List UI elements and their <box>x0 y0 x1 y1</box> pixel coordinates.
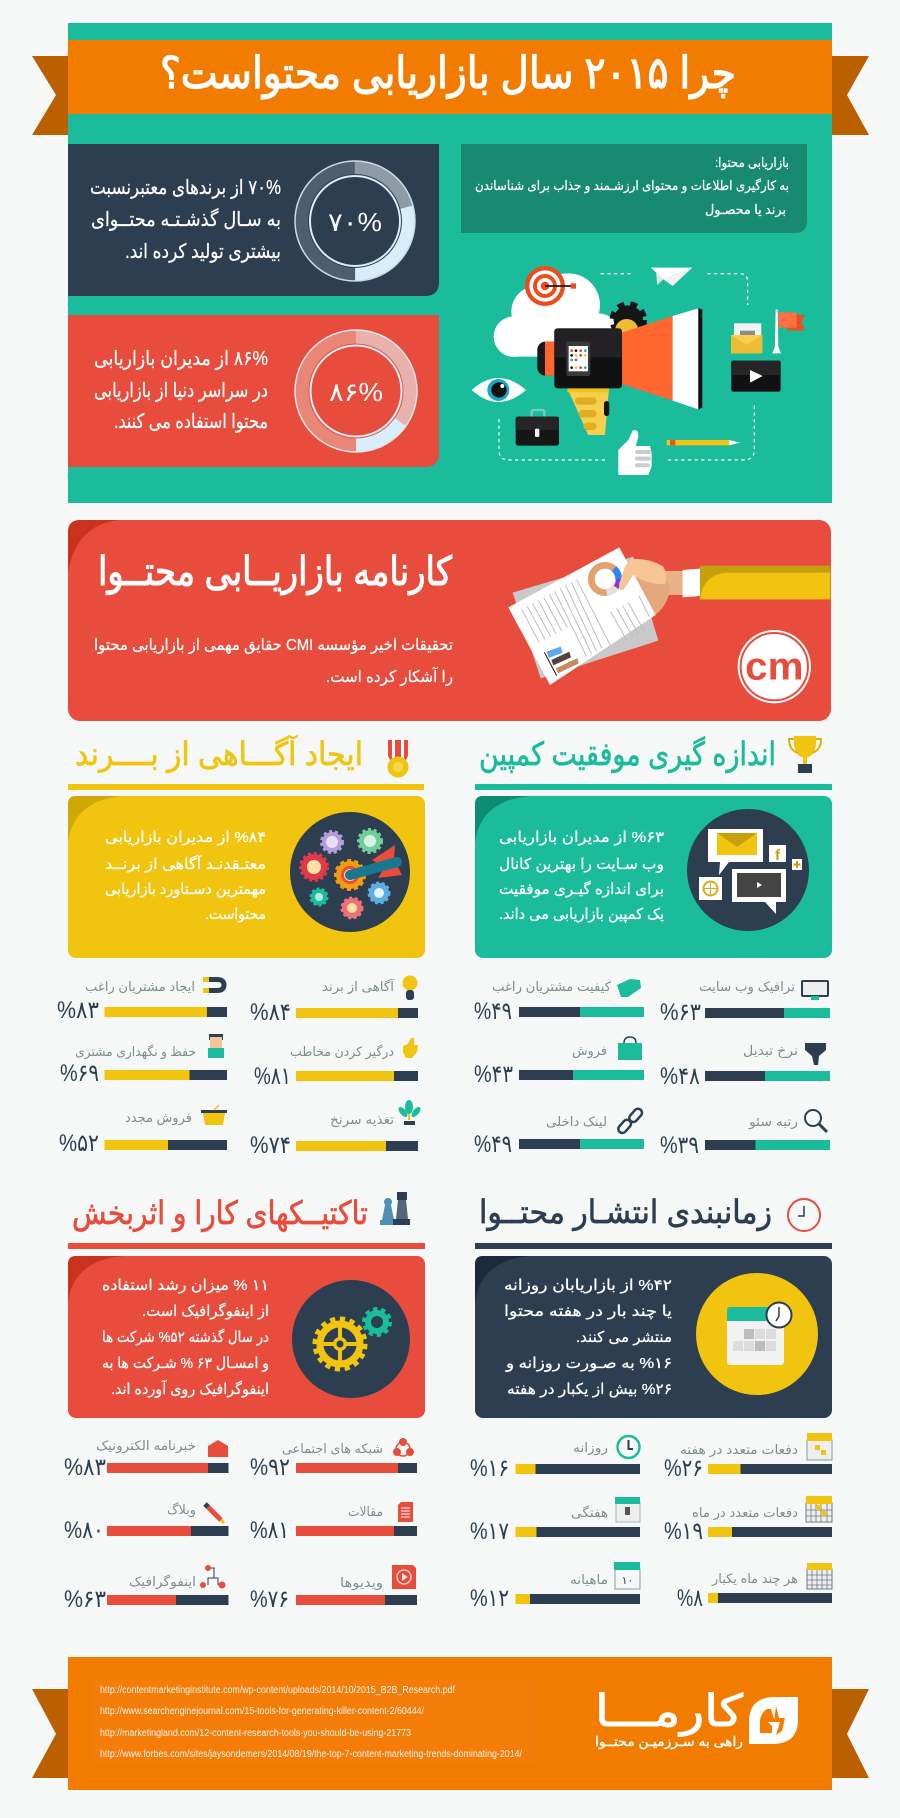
icon: weekly calendar <box>807 1433 832 1460</box>
stat: several times a month: %۱۹ <box>664 1518 703 1545</box>
icon: email <box>208 1440 228 1457</box>
icon: envelope <box>731 323 762 353</box>
stat: lead quality <box>474 979 644 1025</box>
icon: chess pieces <box>380 1192 410 1225</box>
text block <box>499 829 664 924</box>
stat: audience engagement: %۸۱ <box>254 1063 291 1090</box>
text block: یا چند بار در هفته محتوا <box>504 1303 672 1320</box>
stat: repeat sales <box>59 1105 227 1157</box>
stat: videos: %۷۶ <box>250 1586 289 1613</box>
icon: grid calendar <box>807 1563 832 1589</box>
stat: lead nurturing <box>250 1100 422 1159</box>
panel: brand callout <box>68 796 425 958</box>
stat: articles: %۸۱ <box>250 1517 289 1544</box>
stat: monthly: %۱۲ <box>470 1585 509 1612</box>
text block <box>102 1277 269 1398</box>
text block <box>504 1277 672 1398</box>
footer <box>32 1657 869 1790</box>
panel: 86 percent stat: محتوا استفاده می کنند. <box>114 411 268 433</box>
icon: monthly calendar <box>806 1496 832 1522</box>
heading: اندازه گیری موفقیت کمپین <box>479 736 776 773</box>
stat: inbound links <box>474 1107 644 1158</box>
stat: website traffic <box>660 979 830 1026</box>
stat: social media <box>250 1438 417 1481</box>
panel: content marketing scorecard banner <box>68 520 831 721</box>
heading: ایجاد آگـــاهی از بــــرند <box>75 734 363 773</box>
section: effective tactics <box>68 1192 425 1418</box>
stat: inbound links: %۴۹ <box>474 1131 512 1158</box>
source links: http://marketingland.com/12-content-research-tools-you-should-be-using-21773 <box>100 1728 411 1739</box>
icon: magnet <box>203 977 224 993</box>
source links: http://www.forbes.com/sites/jaysondemers/2014/08/19/the-top-7-content-marketing-trends-dominating-2014/ <box>100 1749 522 1760</box>
icon: chain link <box>617 1107 644 1135</box>
stat: conversion rate <box>660 1043 830 1090</box>
icon: connector nodes <box>200 1565 226 1588</box>
icon: target <box>525 266 576 306</box>
panel: definition: برند یا محصـول <box>705 202 786 218</box>
stat: daily: روزانه <box>573 1440 608 1456</box>
stat: website traffic: %۶۳ <box>660 999 701 1026</box>
stat: conversion rate: نرخ تبدیل <box>743 1043 798 1059</box>
panel: 70 percent stat: ۷۰% از برندهای معتبرنسبت <box>90 177 281 199</box>
chart: 70 percent donut <box>295 161 415 281</box>
text block: اینفوگرافیک روی آورده اند. <box>111 1380 269 1398</box>
stat: infographics <box>64 1565 228 1613</box>
text block: محتواست. <box>205 906 266 923</box>
stat: daily: %۱۶ <box>470 1455 509 1482</box>
icon: teal monthly calendar: ۱۰ <box>622 1575 633 1587</box>
section: campaign success <box>475 736 832 958</box>
panel: campaign callout <box>475 796 832 958</box>
icon: calendar circle <box>696 1273 818 1395</box>
icon: plant <box>397 1100 422 1125</box>
stat: sales: %۴۳ <box>474 1061 513 1088</box>
icon: pencil <box>667 440 740 445</box>
icon: medal <box>388 740 408 778</box>
stat: several times a month <box>664 1496 832 1545</box>
panel: 86 percent stat: در سراسر دنیا از بازاریابی <box>94 380 268 402</box>
logo: CM <box>738 630 811 703</box>
text block <box>105 829 266 923</box>
stat: social media: شبکه های اجتماعی <box>282 1441 383 1456</box>
stat: several times a week: دفعات متعدد در هفته <box>680 1442 798 1458</box>
icon: basket <box>201 1105 227 1125</box>
stat: every few months <box>677 1563 832 1612</box>
stat: repeat sales: فروش مجدد <box>125 1110 192 1126</box>
stat: conversion rate: %۴۸ <box>660 1063 700 1090</box>
stat: audience engagement: درگیر کردن مخاطب <box>290 1044 394 1060</box>
text block: یک کمپین بازاریابی می داند. <box>499 906 664 924</box>
text block: را آشکار کرده است. <box>326 667 453 687</box>
stat: email newsletter: خبرنامه الکترونیک <box>96 1438 196 1454</box>
panel: definition: بازاریابی محتوا: <box>715 155 789 171</box>
stat: SEO rank: رتبه سئو <box>748 1114 798 1130</box>
text block: %۲۶ بیش از یکبار در هفته <box>507 1381 672 1398</box>
icon: social network <box>393 1438 414 1456</box>
stat: several times a week <box>664 1433 832 1482</box>
stat: brand awareness: آگاهی از برند <box>322 978 395 995</box>
stat: social media: %۹۲ <box>250 1454 290 1481</box>
icon: briefcase <box>516 410 559 446</box>
icon: light bulb <box>402 976 418 1000</box>
stat: infographics: اینفوگرافیک <box>129 1574 196 1590</box>
stat: lead generation <box>57 977 227 1024</box>
icon: clock <box>788 1199 820 1231</box>
icon: funnel <box>805 1043 826 1065</box>
icon: paper plane <box>651 268 692 286</box>
stat: lead quality: %۴۹ <box>474 998 512 1025</box>
icon: trophy <box>789 736 821 773</box>
icon: gears circle <box>292 1280 410 1398</box>
icon: eye <box>472 378 526 402</box>
illustration: hand holding report <box>508 547 830 703</box>
stat: infographics: %۶۳ <box>64 1586 106 1613</box>
icon: gears and dart circle <box>290 812 410 932</box>
stat: monthly: ماهیانه <box>570 1572 608 1587</box>
stat: blog <box>64 1501 228 1544</box>
icon: flag <box>772 309 805 353</box>
title banner <box>68 40 832 114</box>
text block: مهمترین دسـتاورد بازاریابی <box>105 881 266 898</box>
text block <box>94 637 453 687</box>
icon: cloud <box>494 273 620 357</box>
text block: %۱۶ به صـورت روزانه و <box>505 1355 672 1372</box>
stats: brand goals <box>57 976 422 1159</box>
icon: thumbs up <box>618 430 652 475</box>
stat: blog: %۸۰ <box>64 1517 104 1544</box>
text block: %۸۴ از مدیران بازاریابی <box>105 829 266 846</box>
ribbon: title tails <box>32 56 869 135</box>
section: publishing schedule <box>475 1194 832 1418</box>
panel: 70 percent stat: به سـال گذشـتـه محتــوای <box>91 208 281 231</box>
text block: از اینفوگرافیک است. <box>142 1302 269 1320</box>
panel: 86 percent stat <box>68 315 439 467</box>
icon: monitor <box>802 981 828 1000</box>
stat: customer retention: %۶۹ <box>60 1060 99 1087</box>
icon: teal weekly calendar <box>615 1497 640 1522</box>
panel: schedule callout <box>475 1256 832 1418</box>
dashed connectors <box>499 274 754 460</box>
icon: shopping bag <box>618 1037 642 1060</box>
source links <box>91 1680 535 1762</box>
icon: media circle: f <box>775 847 781 864</box>
illustration: megaphone marketing scene <box>472 266 805 475</box>
stat: videos <box>250 1565 417 1613</box>
icon: pointing hand <box>403 1038 418 1058</box>
text block: ۱۱ % میزان رشد استفاده <box>102 1277 269 1294</box>
icon: video document <box>392 1565 416 1589</box>
text block: %۶۳ از مدیران بازاریابی <box>499 829 664 846</box>
panel: tactics callout <box>68 1256 425 1418</box>
panel: definition <box>461 144 807 233</box>
icon: media circle <box>687 809 809 931</box>
stat: lead nurturing: %۷۴ <box>250 1132 291 1159</box>
icon: pencil <box>205 1504 224 1523</box>
stat: every few months: هر چند ماه یکبار <box>711 1571 798 1587</box>
stats: tactic usage <box>64 1438 417 1613</box>
text block: برای اندازه گیـری موفقیت <box>499 880 664 898</box>
panel: 70 percent stat <box>68 144 439 296</box>
stat: lead generation: %۸۳ <box>57 997 99 1024</box>
panel: definition: به کارگیری اطلاعات و محتوای ارزشـمند و جذاب برای شناساندن <box>475 178 789 194</box>
stat: blog: وبلاگ <box>167 1501 196 1518</box>
stat: daily <box>470 1436 640 1482</box>
text block: تحقیقات اخیر مؤسسه CMI حقایق مهمی از بازاریابی محتوا <box>94 637 453 655</box>
stat: email newsletter <box>64 1438 228 1481</box>
heading: کارنامه بازاریــابی محتــوا <box>98 550 453 595</box>
stat: brand awareness <box>250 976 418 1026</box>
chart: 86 percent donut <box>295 330 417 452</box>
icon: magnifier <box>805 1110 827 1132</box>
icon: tag <box>617 979 641 997</box>
icon: teal monthly calendar <box>614 1562 640 1589</box>
ribbon: footer tails <box>32 1689 869 1778</box>
stat: brand awareness: %۸۴ <box>250 999 291 1026</box>
stat: lead nurturing: تغذیه سرنخ <box>330 1112 394 1128</box>
source links: http://contentmarketinginstitute.com/wp-content/uploads/2014/10/2015_B2B_Research.pdf <box>100 1685 455 1696</box>
icon: video player <box>731 361 781 392</box>
panel: 70 percent stat: بیشتری تولید کرده اند. <box>125 241 281 263</box>
stat: articles <box>250 1502 417 1544</box>
stat: several times a month: دفعات متعدد در ماه <box>692 1505 798 1521</box>
stat: SEO rank <box>660 1110 830 1159</box>
stat: lead quality: کیفیت مشتریان راغب <box>492 979 612 995</box>
stat: monthly <box>470 1562 640 1612</box>
stat: website traffic: ترافیک وب سایت <box>699 979 795 995</box>
stat: weekly: هفتگی <box>571 1505 608 1520</box>
heading: تاکتیــکهای کارا و اثربخش <box>72 1195 368 1232</box>
icon: person <box>208 1034 224 1058</box>
icon: gear <box>613 305 644 342</box>
logo: CM: cm <box>745 644 803 688</box>
logo: Karma: کارمـــا <box>595 1687 743 1737</box>
text block: و امسـال ۶۳ % شـرکت ها به <box>102 1355 269 1372</box>
text block: وب سـایت را بهترین کانال <box>499 856 664 873</box>
panel: hero <box>32 23 869 503</box>
stats: publishing frequency <box>470 1433 832 1612</box>
stat: several times a week: %۲۶ <box>664 1455 703 1482</box>
source links: http://www.searchenginejournal.com/15-tools-for-generating-killer-content-2/60444/ <box>100 1706 424 1717</box>
stat: customer retention <box>60 1034 227 1087</box>
stat: articles: مقالات <box>348 1504 383 1519</box>
icon: document <box>398 1502 413 1522</box>
stat: sales: فروش <box>572 1043 607 1059</box>
stat: SEO rank: %۳۹ <box>660 1132 699 1159</box>
panel: 86 percent stat: ۸۶% از مدیران بازاریابی <box>94 348 268 370</box>
stat: lead generation: ایجاد مشتریان راغب <box>85 979 195 995</box>
stat: videos: ویدیوها <box>340 1575 383 1591</box>
icon: teal clock <box>618 1436 640 1458</box>
heading: زمانبندی انتشـار محتــوا <box>479 1194 772 1231</box>
stat: inbound links: لینک داخلی <box>546 1114 607 1129</box>
stat: audience engagement <box>254 1038 418 1090</box>
text block: %۴۲ از بازاریابان روزانه <box>504 1277 672 1294</box>
chart: 70 percent donut: ۷۰% <box>328 207 382 237</box>
stat: sales <box>474 1037 644 1088</box>
section: brand awareness <box>68 734 425 958</box>
stat: email newsletter: %۸۳ <box>64 1454 106 1481</box>
logo: Karma <box>595 1687 798 1750</box>
chart: 86 percent donut: ۸۶% <box>329 377 383 407</box>
text block: در سال گذشته ۵۲% شرکت ها <box>102 1328 269 1346</box>
stat: repeat sales: %۵۲ <box>59 1130 99 1157</box>
title banner: چرا ۲۰۱۵ سال بازاریابی محتواست؟ <box>160 49 736 99</box>
text block: منتشر می کنند. <box>576 1329 672 1346</box>
logo: Karma: راهی به سـرزمیـن محتــوا <box>595 1734 743 1750</box>
stat: weekly: %۱۷ <box>470 1518 509 1545</box>
stat: customer retention: حفظ و نگهداری مشتری <box>75 1044 196 1060</box>
text block: معتـقدنـد آگاهی از برنــد <box>105 855 266 873</box>
stat: weekly <box>470 1497 640 1545</box>
stats: campaign measures <box>474 979 830 1159</box>
icon: megaphone <box>537 308 702 435</box>
stat: every few months: %۸ <box>677 1585 703 1612</box>
